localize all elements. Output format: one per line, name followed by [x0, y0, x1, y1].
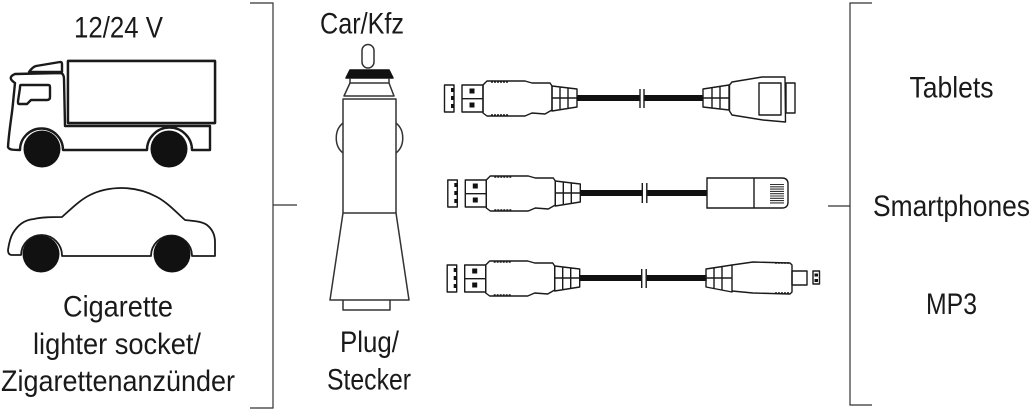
icon: car plug [330, 44, 409, 310]
label: 12/24 V: 12/24 V [74, 12, 163, 44]
label: cigarette lighter socket: lighter socket/ [33, 328, 202, 361]
right bracket [828, 3, 872, 405]
icon: truck [8, 61, 215, 168]
label: Plug/Stecker: Plug/ [340, 326, 400, 359]
label: cigarette lighter socket: Zigarettenanzünder [1, 365, 235, 398]
icon: car [8, 188, 215, 272]
cable 3: USB to micro connector [447, 261, 707, 296]
micro connector [706, 262, 820, 294]
label: cigarette lighter socket: Cigarette [63, 290, 173, 324]
label: cigarette lighter socket [1, 290, 235, 398]
left bracket [250, 3, 297, 408]
lightning connector [707, 178, 788, 208]
label: Plug/Stecker [327, 326, 411, 396]
cable 1: USB to tablet connector [444, 77, 795, 122]
label: Plug/Stecker: Stecker [327, 364, 411, 396]
label: MP3: MP3 [926, 288, 977, 321]
label: Tablets: Tablets [910, 72, 994, 104]
label: Car/Kfz: Car/Kfz [320, 8, 404, 40]
cable 2: USB to Lightning connector [448, 176, 707, 211]
